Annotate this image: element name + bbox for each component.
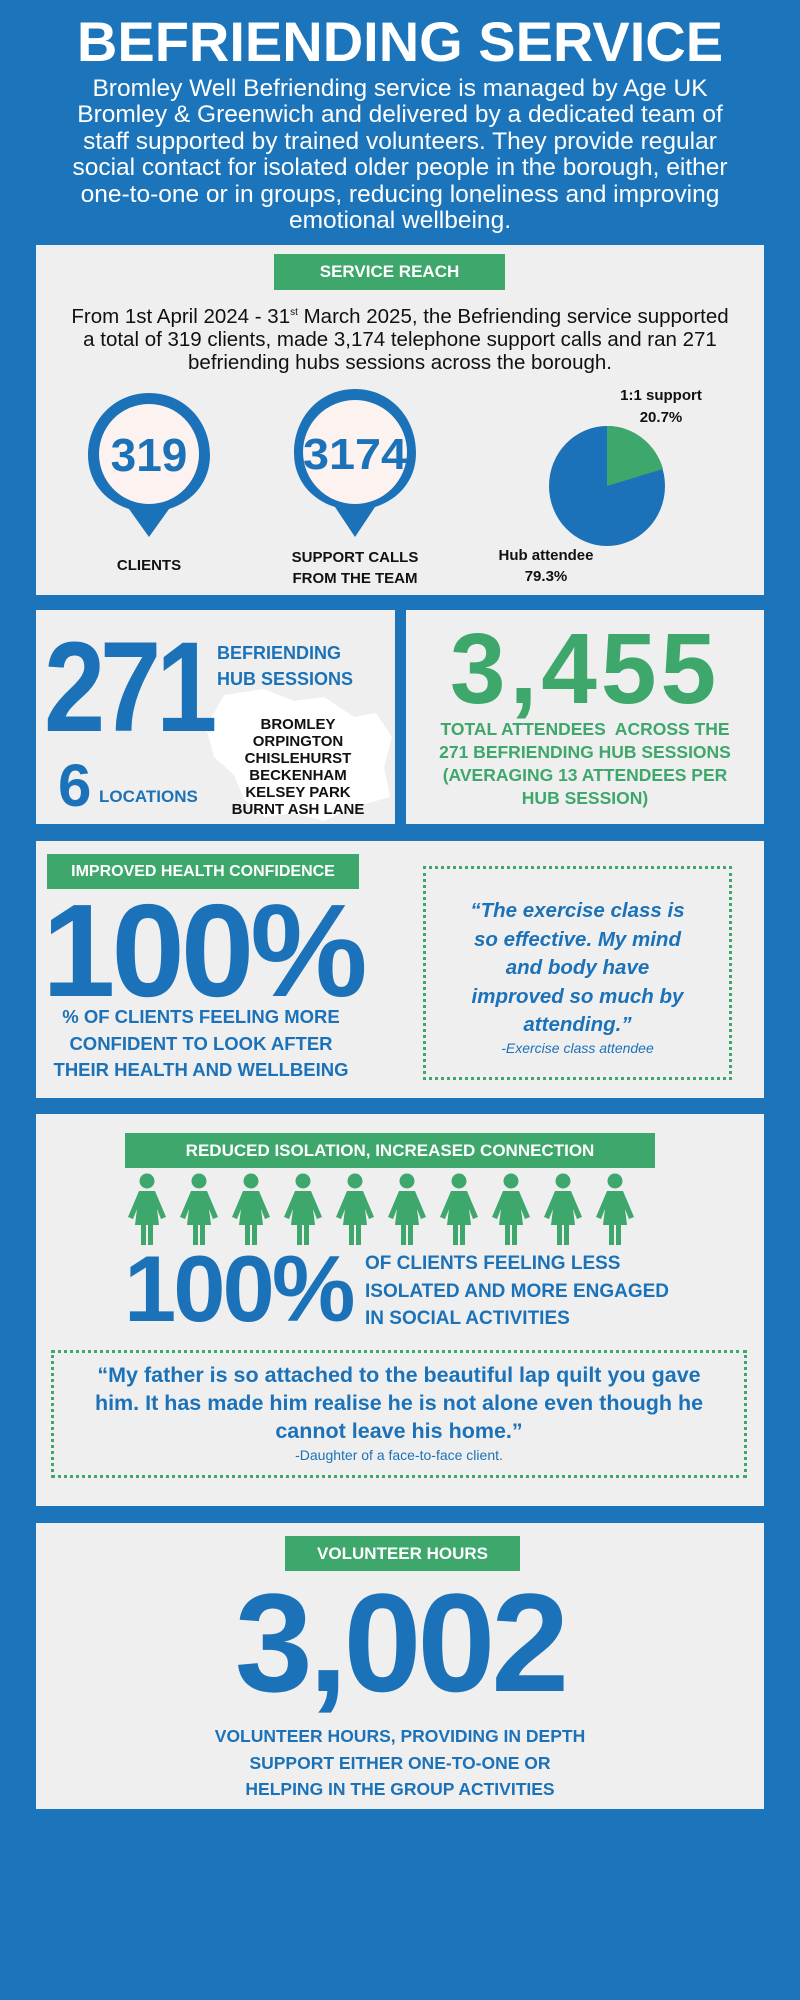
list: locations: BECKENHAM — [249, 767, 347, 784]
intro text: service reach: befriending hubs sessions across the borough. — [188, 351, 612, 374]
intro text: service reach: From 1st April 2024 - 31st March 2025, the Befriending service supported — [71, 305, 729, 328]
pie label: 1:1 support: 1:1 support — [620, 387, 702, 404]
list: locations: BROMLEY — [260, 716, 336, 733]
intro text: Bromley & Greenwich and delivered by a dedicated team of — [77, 101, 723, 128]
panel: attendees — [406, 610, 764, 824]
quote text: “My father is so attached to the beautiful lap quilt you gave — [97, 1363, 701, 1387]
text: clients more confident: CONFIDENT TO LOOK AFTER — [69, 1032, 333, 1054]
pie label: hub attendee: Hub attendee — [498, 547, 594, 564]
text: clients less isolated: ISOLATED AND MORE ENGAGED — [365, 1280, 669, 1302]
intro text: social contact for isolated older people in the borough, either — [72, 154, 728, 181]
label: support calls: FROM THE TEAM — [292, 570, 418, 587]
stat: 3,002: 3,002 — [235, 1564, 565, 1721]
label: clients: CLIENTS — [117, 557, 181, 574]
text: clients more confident: % OF CLIENTS FEELING MORE — [62, 1006, 340, 1027]
intro text: staff supported by trained volunteers. They provide regular — [83, 128, 717, 155]
list: locations: CHISLEHURST — [245, 750, 351, 767]
quote box: exercise class — [423, 866, 732, 1080]
intro text: emotional wellbeing. — [289, 207, 511, 234]
list: locations: KELSEY PARK — [245, 784, 351, 801]
label: volunteer hours: VOLUNTEER HOURS — [317, 1544, 488, 1563]
pie chart — [549, 426, 665, 546]
label: befriending hub sessions — [217, 643, 353, 689]
label: befriending hub sessions: BEFRIENDING — [217, 643, 341, 663]
intro text: service reach — [71, 305, 729, 374]
attribution: -Daughter of a face-to-face client. — [295, 1447, 503, 1463]
panel: hub sessions — [36, 610, 395, 824]
text: clients less isolated: OF CLIENTS FEELING LESS — [365, 1253, 620, 1274]
text: clients less isolated — [365, 1253, 669, 1329]
label: support calls — [292, 549, 418, 587]
panel: service reach — [36, 245, 764, 595]
text: clients more confident: THEIR HEALTH AND WELLBEING — [54, 1059, 348, 1080]
text: total attendees: TOTAL ATTENDEES ACROSS THE — [440, 719, 730, 739]
text: total attendees — [439, 719, 731, 808]
text: clients more confident — [54, 1006, 348, 1080]
icon: pin 319 — [88, 393, 210, 537]
label: improved health confidence — [47, 854, 359, 889]
quote text — [95, 1363, 703, 1443]
intro text — [72, 75, 728, 234]
text: clients less isolated: IN SOCIAL ACTIVITIES — [365, 1308, 570, 1329]
text: total attendees: 271 BEFRIENDING HUB SESSIONS — [439, 742, 731, 762]
label: reduced isolation: REDUCED ISOLATION, INCREASED CONNECTION — [186, 1141, 594, 1160]
icon: pin 3174: 3174 — [303, 430, 408, 479]
panel: improved health confidence — [36, 841, 764, 1098]
text: volunteer hours description: VOLUNTEER HOURS, PROVIDING IN DEPTH — [215, 1726, 585, 1746]
pie label: 1:1 support: 20.7% — [640, 409, 682, 426]
list: locations: BURNT ASH LANE — [232, 801, 364, 818]
label: improved health confidence: IMPROVED HEALTH CONFIDENCE — [71, 863, 335, 880]
label: volunteer hours — [285, 1536, 520, 1571]
quote text: him. It has made him realise he is not alone even though he — [95, 1391, 703, 1415]
label: locations: LOCATIONS — [99, 787, 198, 806]
quote text: improved so much by — [472, 984, 683, 1008]
text: total attendees: (AVERAGING 13 ATTENDEES PER — [443, 765, 727, 785]
quote text: “The exercise class is — [470, 899, 685, 922]
intro text: one-to-one or in groups, reducing loneliness and improving — [81, 181, 719, 208]
stat: 3,455: 3,455 — [450, 613, 720, 725]
label: support calls: SUPPORT CALLS — [292, 549, 418, 566]
intro text: service reach: a total of 319 clients, made 3,174 telephone support calls and ran 271 — [83, 328, 717, 351]
label: reduced isolation — [125, 1133, 655, 1168]
icons: ten people — [128, 1174, 634, 1245]
text: total attendees: HUB SESSION) — [522, 788, 648, 808]
list: locations — [232, 716, 364, 818]
stat: 6 locations: 6 — [58, 752, 91, 819]
quote text: and body have — [506, 956, 649, 979]
pie label: 1:1 support — [620, 387, 702, 426]
panel: reduced isolation — [36, 1114, 764, 1506]
stat: 100%: 100% — [42, 877, 364, 1024]
title: BEFRIENDING SERVICE — [77, 10, 723, 73]
quote box: lap quilt — [51, 1350, 747, 1478]
text: volunteer hours description — [214, 1726, 585, 1799]
label: service reach — [274, 254, 505, 290]
text: volunteer hours description: SUPPORT EITHER ONE-TO-ONE OR — [249, 1752, 551, 1772]
panel: volunteer hours — [36, 1523, 764, 1809]
quote text — [470, 899, 685, 1036]
quote text: so effective. My mind — [474, 928, 681, 950]
text: volunteer hours description: HELPING IN THE GROUP ACTIVITIES — [245, 1779, 555, 1799]
quote text: cannot leave his home.” — [275, 1419, 523, 1443]
quote text: attending.” — [523, 1013, 632, 1036]
label: befriending hub sessions: HUB SESSIONS — [217, 669, 353, 689]
pie label: hub attendee — [498, 547, 594, 585]
pie label: hub attendee: 79.3% — [525, 568, 567, 585]
icon: pin 3174 — [294, 389, 416, 537]
attribution: -Exercise class attendee — [501, 1040, 654, 1056]
intro text: Bromley Well Befriending service is managed by Age UK — [92, 75, 708, 102]
map: white borough shape — [207, 689, 392, 821]
stat: 100%: 100% — [124, 1236, 352, 1341]
label: service reach: SERVICE REACH — [320, 262, 459, 281]
list: locations: ORPINGTON — [253, 733, 343, 750]
stat: 271: 271 — [44, 616, 212, 759]
icon: pin 319: 319 — [111, 429, 187, 481]
